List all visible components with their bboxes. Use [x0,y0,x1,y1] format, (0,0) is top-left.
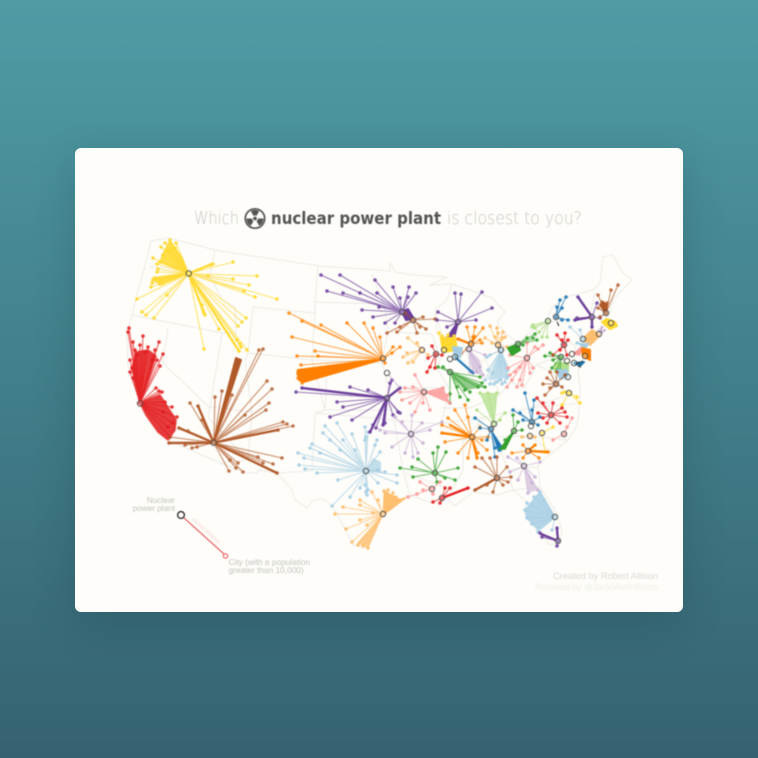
star: light purple Georgia plant [508,457,540,493]
star: light purple Nebraska plant [387,373,400,388]
star: yellow Washington plant [137,240,277,351]
star: orange New Jersey plant [557,322,590,367]
legend plant marker [178,512,184,518]
star: pink Missouri plant [400,375,450,412]
star: light green Kentucky plant [477,393,505,424]
credits: Remixed by @JackMerlinBruce [535,581,658,592]
star: brown Alabama plant [475,457,511,492]
legend city marker [223,554,228,558]
star: red Iowa plant [427,346,442,372]
icon: radiation symbol [245,209,265,228]
star: light green New York plant [532,321,548,337]
legend label: city: greater than 10,000) [228,565,304,575]
star: pink Pennsylvania plant [507,343,543,387]
star: green North Carolina plant [500,415,522,449]
star: red Virginia plant [537,398,567,423]
star: brown Maine plant [598,285,618,317]
star: orange Michigan plant [458,327,483,355]
star: purple Florida plant [540,528,558,546]
star: yellow Wisconsin plant [439,333,457,352]
star: yellow Massachusetts plant [602,319,617,329]
star: light orange North Carolina plant [522,436,535,437]
star: pink North Carolina coast plant [553,418,572,440]
legend line: closest distance [184,518,224,554]
title [194,208,582,229]
credits: Created by Robert Allison [553,570,658,581]
legend label: city: City (with a population [228,557,311,567]
star: green Indiana plant [438,367,485,403]
star: light orange Iowa plant [403,338,428,363]
star: light purple Massachusetts plant [590,327,605,340]
star: red Louisiana plant [433,488,468,503]
title: is closest to you? [447,208,582,229]
star: red New Jersey plant [553,333,568,355]
star: green Lake Erie plant [508,334,537,355]
star: light purple Illinois plant [462,349,485,375]
legend label: plant: Nuclear [147,496,175,505]
star: orange Tennessee plant [442,405,488,458]
nuclear plant markers [137,271,614,544]
star: purple Kansas plant [296,380,400,432]
star: light purple Arkansas plant [380,415,442,457]
star: brown Virginia plant [543,372,565,395]
star: yellow North Carolina plant [542,427,553,452]
star: light orange Gulf plant [335,490,405,548]
star: light blue Florida plant [525,492,555,532]
star: brown Minnesota plant [387,313,435,333]
star: orange Nebraska plant [289,313,400,383]
star: light green and green Pennsylvania plant [545,353,568,372]
star: purple Vermont plant [575,297,600,327]
credits [535,570,658,592]
star: blue New York plant [556,297,568,320]
title: nuclear power plant [271,209,441,229]
legend label: plant: power plant [133,504,176,513]
star: green Mississippi plant [400,447,458,482]
star: blue Virginia plant [513,393,540,425]
star: purple Minnesota plant [321,275,416,323]
star: blue Tennessee plant [475,418,504,457]
map of US states [127,238,632,548]
star: orange South Carolina plant [512,445,548,458]
star: brown Arizona plant [169,349,293,473]
legend [133,496,311,575]
star: red California plant [128,328,177,440]
star: light blue Ohio plant [485,350,508,384]
star: light blue Texas plant [298,423,397,506]
background card [75,148,683,612]
star: pink Louisiana plant [408,482,440,497]
star: light orange and light blue Connecticut plant [570,327,600,350]
star: light orange Michigan plant [485,326,507,347]
title: Which [194,208,239,229]
legend rotated caption: closest distance [191,517,221,545]
star: light blue Maryland plant [557,370,568,379]
star: purple Wisconsin plant [437,292,492,338]
star: light blue and blue Illinois plant [453,347,473,373]
star: yellow Virginia plant [562,392,580,405]
